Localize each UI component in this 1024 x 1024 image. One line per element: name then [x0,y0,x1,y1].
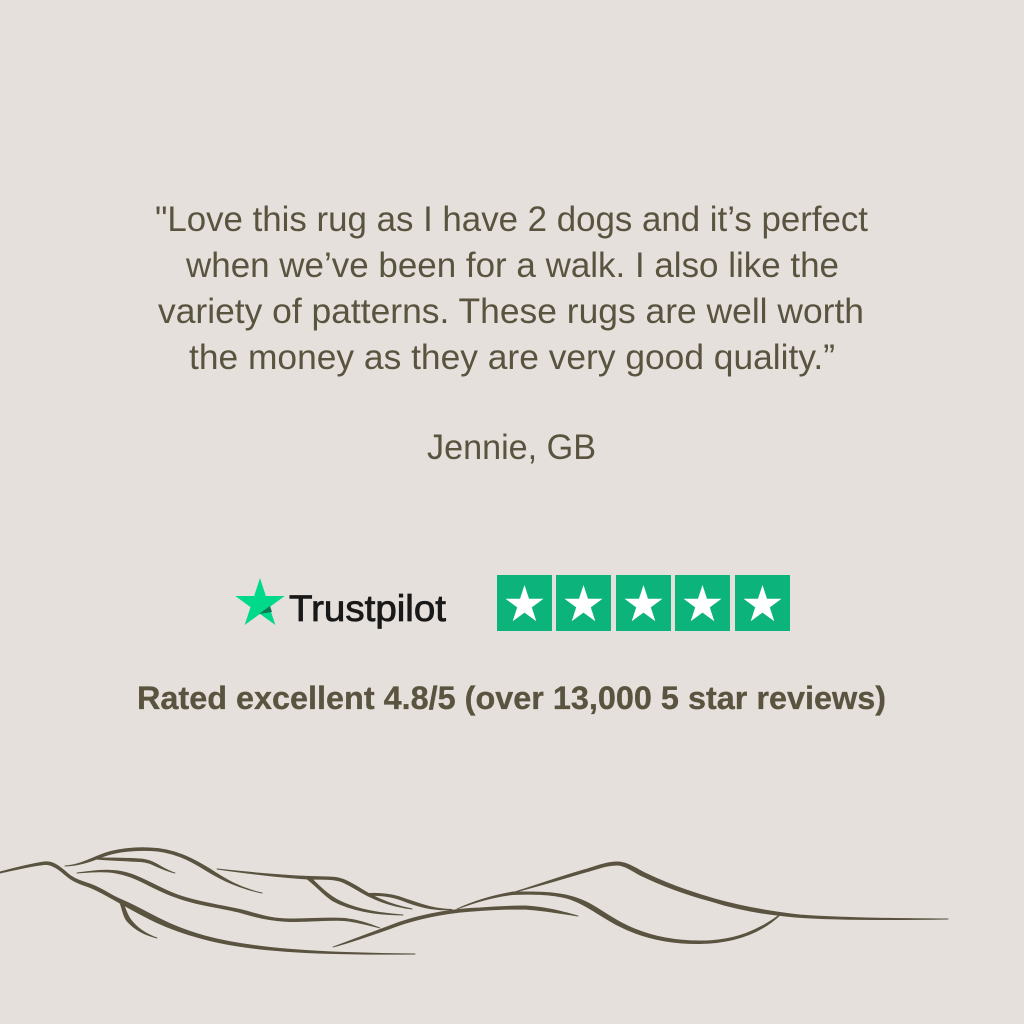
Trustpilot logo [235,578,447,629]
rating summary: Rated excellent 4.8/5 (over 13,000 5 star reviews) [137,680,886,716]
review quote: when we’ve been for a walk. I also like the [185,246,839,285]
review quote: the money as they are very good quality.” [189,338,835,377]
illustration: mountain line drawing [0,848,948,954]
Trustpilot wordmark: Trustpilot [289,588,447,629]
review quote: "Love this rug as I have 2 dogs and it’s perfect [155,200,868,239]
icon: Trustpilot star [235,578,285,625]
five star rating [497,575,790,631]
review quote [155,200,868,377]
review author: Jennie, GB [427,428,596,467]
review quote: variety of patterns. These rugs are well worth [158,292,864,331]
